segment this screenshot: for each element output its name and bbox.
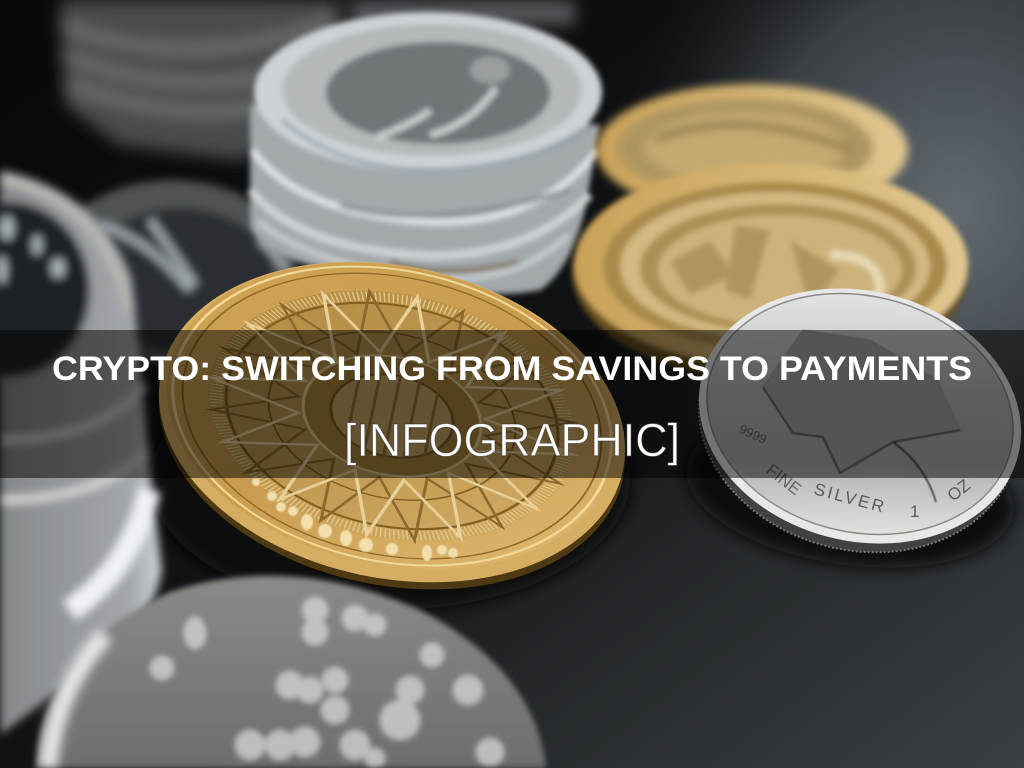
coin inscription: 9999 xyxy=(737,421,769,447)
title: CRYPTO: SWITCHING FROM SAVINGS TO PAYMENTS xyxy=(52,350,972,388)
gold coin, rear xyxy=(596,84,908,216)
silver coin stack, top centre xyxy=(250,12,602,294)
coin inscription xyxy=(737,421,974,521)
coin inscription: 1 xyxy=(910,502,919,521)
silver maple coin shadow xyxy=(676,393,1024,587)
coin inscription: OZ xyxy=(944,476,974,505)
main coin shadow xyxy=(150,350,630,610)
left silver coin stack xyxy=(0,170,162,735)
blurred silver coin, front xyxy=(35,576,546,768)
back-left silver coin xyxy=(47,180,297,364)
subtitle: [INFOGRAPHIC] xyxy=(344,414,680,466)
main gold crypto coin xyxy=(129,220,655,631)
coin inscription: SILVER xyxy=(812,480,889,517)
title band xyxy=(0,330,1024,478)
coin inscription: FINE xyxy=(763,460,805,499)
silver maple leaf coin xyxy=(671,255,1024,585)
icon: maple leaf xyxy=(763,330,960,502)
gold coin, middle right xyxy=(572,163,968,380)
back silver stack, top left xyxy=(60,0,575,160)
